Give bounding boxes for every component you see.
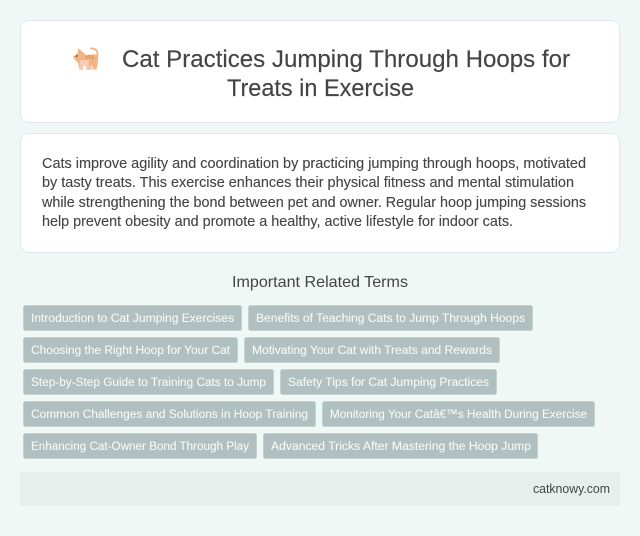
heading: related terms: Important Related Terms: [232, 274, 408, 291]
footer: [20, 472, 620, 506]
text block: description: help prevent obesity and promote a healthy, active lifestyle for indoor cats.: [42, 214, 513, 230]
title: Treats in Exercise: [227, 75, 414, 102]
tag list: Benefits of Teaching Cats to Jump Through Hoops: [256, 311, 525, 325]
tag list: Advanced Tricks After Mastering the Hoop Jump: [271, 439, 531, 453]
tag list: Common Challenges and Solutions in Hoop Training: [31, 407, 308, 421]
panel: title card: [20, 20, 620, 122]
text block: description: while strengthening the bond between pet and owner. Regular hoop jumping sessions: [41, 195, 586, 211]
tag list: Monitoring Your Catâ€™s Health During Exercise: [330, 407, 587, 421]
tag list: Safety Tips for Cat Jumping Practices: [288, 375, 489, 389]
text block: description: [41, 156, 586, 230]
icon: cat: [73, 48, 98, 70]
tag list: Step-by-Step Guide to Training Cats to Jump: [31, 375, 266, 389]
tag list: Introduction to Cat Jumping Exercises: [31, 311, 234, 325]
panel: description: [20, 134, 620, 252]
title: Cat Practices Jumping Through Hoops for: [122, 46, 570, 73]
tag list: Choosing the Right Hoop for Your Cat: [31, 343, 231, 357]
tag list: [24, 306, 594, 458]
tag list: Motivating Your Cat with Treats and Rewards: [252, 343, 492, 357]
tag list: Enhancing Cat-Owner Bond Through Play: [31, 439, 250, 453]
text block: description: by tasty treats. This exercise enhances their physical fitness and mental stimulation: [42, 175, 574, 191]
footer: catknowy.com: [533, 481, 610, 496]
title: [122, 46, 570, 102]
text block: description: Cats improve agility and coordination by practicing jumping through hoops, motivated: [42, 156, 586, 172]
